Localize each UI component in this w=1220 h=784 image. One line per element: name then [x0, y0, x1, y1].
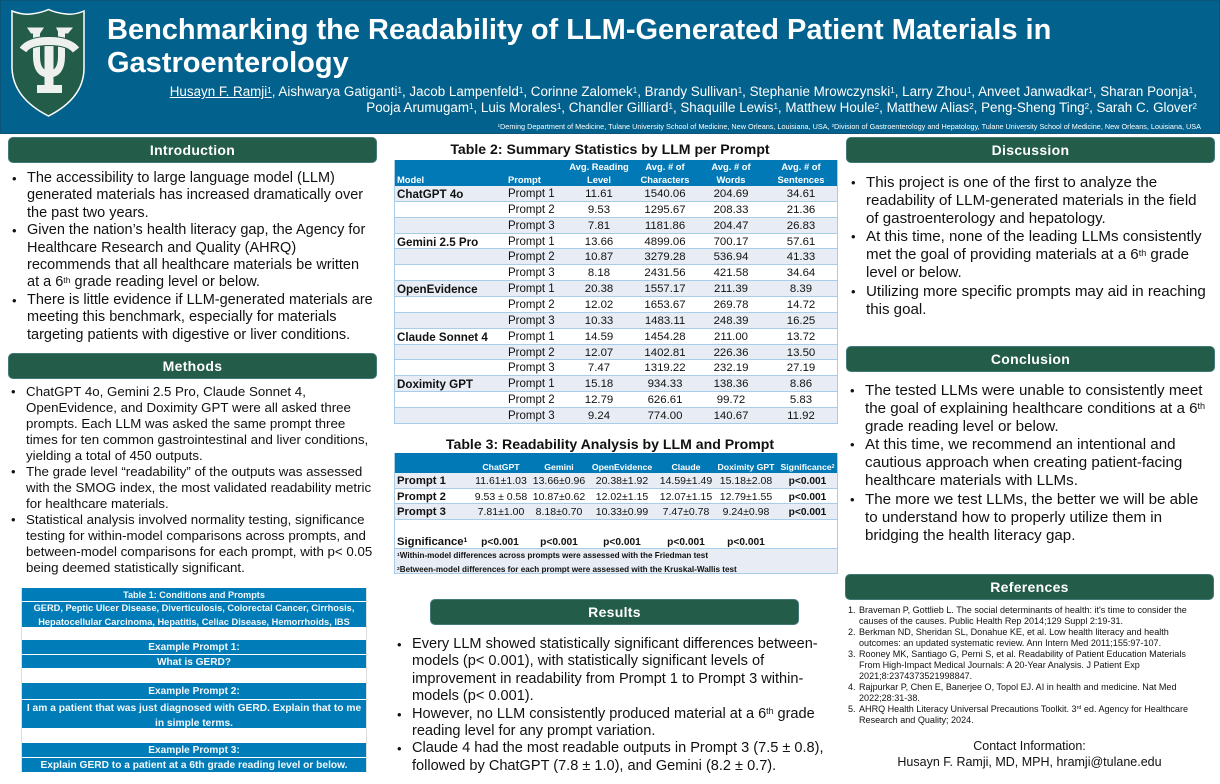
header banner: [0, 0, 1220, 134]
example prompt 3 label: [22, 743, 366, 757]
example prompt 1 text: [22, 655, 366, 668]
title: Gastroenterology: [107, 47, 349, 79]
text block: discussion bullets: [852, 174, 1206, 318]
text block: conclusion bullets: bridging the health literacy gap.: [865, 527, 1075, 544]
table 3: readability analysis: [395, 453, 837, 574]
table 2: summary statistics: Avg. # of: [781, 161, 821, 172]
table 2: summary statistics: [395, 160, 837, 424]
table 2: summary statistics: 626.61: [648, 394, 682, 406]
table 3: readability analysis: 7.81±1.00: [478, 506, 524, 518]
heading: Introduction: [8, 137, 377, 163]
significance row: p<0.001: [667, 537, 705, 548]
table 2: summary statistics: Prompt 1: [508, 331, 555, 343]
table 2: summary statistics: 204.69: [714, 188, 748, 200]
table 2: summary statistics: Prompt 1: [508, 236, 555, 248]
authors: Husayn F. Ramji1, Aishwarya Gatiganti1, Jacob Lampenfeld1, Corinne Zalomek1, Brandy Sullivan1, Stephanie Mrowczynski1, Larry Zhou1, Anveet Janwadkar1, Sharan Poonja1,: [170, 84, 1197, 99]
table 2: summary statistics: Prompt: [508, 174, 541, 185]
table 2: summary statistics: Claude Sonnet 4: [397, 331, 488, 344]
table 2: summary statistics: 34.61: [787, 188, 815, 200]
heading: References: References: [990, 579, 1069, 595]
text block: methods bullets: testing for within-model comparisons across prompts, and: [26, 528, 366, 543]
example prompt 2 label: Example Prompt 2:: [148, 686, 240, 697]
example prompt 3 label: Example Prompt 3:: [148, 745, 240, 756]
table 3: readability analysis: Gemini: [544, 462, 574, 472]
table 3: readability analysis: 9.24±0.98: [723, 506, 769, 518]
table 1: conditions and prompts: [22, 588, 366, 772]
heading: Methods: Methods: [163, 358, 222, 374]
table 2: summary statistics: 1557.17: [644, 283, 686, 295]
table 2: summary statistics: Avg. # of: [645, 161, 685, 172]
table 2: summary statistics: 57.61: [787, 236, 815, 248]
text block: introduction bullets: targeting patients with digestive or liver conditions.: [27, 327, 350, 343]
heading: table 2: Table 2: Summary Statistics by LLM per Prompt: [450, 141, 770, 157]
text: 1.: [848, 605, 856, 615]
table 3: readability analysis: Prompt 3: [397, 506, 446, 518]
table 2: summary statistics: 774.00: [648, 410, 682, 422]
table 2: summary statistics: 269.78: [714, 299, 748, 311]
table 3: readability analysis: 7.47±0.78: [663, 506, 709, 518]
text block: discussion bullets: level or below.: [866, 264, 962, 281]
text block: conclusion bullets: the goal of explaining healthcare conditions at a 6th: [865, 400, 1205, 417]
heading: Introduction: Introduction: [150, 142, 235, 158]
table 2: summary statistics: Prompt 3: [508, 410, 555, 422]
table 2: summary statistics: 12.02: [585, 299, 613, 311]
significance row: p<0.001: [603, 537, 641, 548]
table 2: summary statistics: 1319.22: [644, 362, 686, 374]
authors: [170, 84, 1197, 115]
table 2: summary statistics: 41.33: [787, 251, 815, 263]
text: 4.: [848, 682, 856, 692]
table 2: summary statistics: Characters: [640, 174, 690, 185]
table 3: readability analysis: 10.33±0.99: [596, 506, 648, 518]
table 2: summary statistics: 700.17: [714, 236, 748, 248]
table 2: summary statistics: 12.07: [585, 347, 613, 359]
text block: discussion bullets: of gastroenterology and hepatology.: [866, 210, 1106, 227]
table 3 footnotes: 1Within-model differences across prompts were assessed with the Friedman test: [397, 551, 708, 560]
table 2: summary statistics: 204.47: [714, 220, 748, 232]
text block: conclusion bullets: [850, 382, 1205, 544]
text block: discussion bullets: readability of LLM-generated materials in the field: [866, 192, 1197, 209]
text block: methods bullets: yielding a total of 450 outputs.: [26, 448, 203, 463]
table 2: summary statistics: Prompt 2: [508, 251, 555, 263]
text block: references list: Rooney MK, Santiago G, Perni S, et al. Readability of Patient Education Materials: [859, 649, 1186, 659]
text block: discussion bullets: this goal.: [866, 301, 926, 318]
table 2: summary statistics: 3279.28: [644, 251, 686, 263]
heading: Results: Results: [588, 604, 641, 620]
table 2: summary statistics: 14.59: [585, 331, 613, 343]
table 2: summary statistics: 8.86: [790, 378, 812, 390]
table 2: summary statistics: 13.66: [585, 236, 613, 248]
example prompt 2 text: I am a patient that was just diagnosed with GERD. Explain that to me: [27, 703, 361, 714]
text: 3.: [848, 649, 856, 659]
text block: references list: causes of the causes. Public Health Rep 2014;129 Suppl 2:19-31.: [859, 616, 1123, 626]
text block: introduction bullets: The accessibility to large language model (LLM): [27, 170, 335, 186]
text block: introduction bullets: [12, 170, 373, 343]
table 2: summary statistics: 7.47: [588, 362, 610, 374]
table 3: readability analysis: 15.18±2.08: [720, 475, 772, 487]
table 2: summary statistics: 1454.28: [644, 331, 686, 343]
table 2: summary statistics: 536.94: [714, 251, 748, 263]
text block: discussion bullets: This project is one of the first to analyze the: [866, 174, 1157, 191]
text block: references list: 2022;28:31-38.: [859, 693, 920, 703]
table 2: summary statistics: 1483.11: [645, 315, 685, 327]
table 2: summary statistics: 21.36: [787, 204, 815, 216]
table 3: readability analysis: 13.66±0.96: [533, 475, 585, 487]
table 2: summary statistics: 10.87: [585, 251, 613, 263]
significance row: p<0.001: [540, 537, 578, 548]
table 2: summary statistics: 14.72: [787, 299, 815, 311]
example prompt 3 text: Explain GERD to a patient at a 6th grade reading level or below.: [40, 760, 348, 771]
table 3: readability analysis: OpenEvidence: [592, 462, 652, 472]
contact information: [897, 739, 1162, 769]
table 2: summary statistics: Prompt 3: [508, 220, 555, 232]
title: Benchmarking the Readability of LLM-Generated Patient Materials in: [107, 14, 1051, 46]
table 3: readability analysis: 14.59±1.49: [660, 475, 712, 487]
contact information: Contact Information:: [973, 739, 1086, 753]
table 2: summary statistics: 7.81: [588, 220, 610, 232]
table 2: summary statistics: 2431.56: [644, 267, 686, 279]
table 2: summary statistics: Prompt 1: [508, 378, 555, 390]
text block: introduction bullets: meeting this benchmark, especially for materials: [27, 309, 336, 325]
text block: methods bullets: for healthcare materials.: [26, 496, 169, 511]
heading: Conclusion: [846, 346, 1215, 372]
table 2: summary statistics: Doximity GPT: [397, 378, 473, 391]
text block: introduction bullets: recommends that all healthcare materials be written: [27, 257, 359, 273]
text block: methods bullets: OpenEvidence, and Doximity GPT were all asked three: [26, 400, 351, 415]
table 2: summary statistics: Prompt 3: [508, 267, 555, 279]
example prompt 2 label: [22, 683, 366, 699]
text block: references list: Research and Quality; 2024.: [859, 715, 974, 725]
table 2: summary statistics: Level: [587, 174, 611, 185]
table 2: summary statistics: 9.53: [588, 204, 610, 216]
example prompt 1 label: [22, 640, 366, 654]
table 2: summary statistics: Sentences: [778, 174, 824, 185]
table 2: summary statistics: 10.33: [585, 315, 613, 327]
text block: results bullets: followed by ChatGPT (7.8 ± 1.0), and Gemini (8.2 ± 0.7).: [412, 758, 776, 774]
icon: Tulane shield logo: [11, 8, 85, 117]
significance row: p<0.001: [727, 537, 765, 548]
text block: introduction bullets: the past two years.: [27, 205, 149, 221]
text block: results bullets: improvement in readability from Prompt 1 to Prompt 3 within-: [412, 671, 803, 687]
table 1 conditions: GERD, Peptic Ulcer Disease, Diverticulosis, Colorectal Cancer, Cirrhosis,: [34, 603, 354, 613]
text: 5.: [848, 704, 856, 714]
table 3: readability analysis: Doximity GPT: [718, 462, 774, 472]
table 3: readability analysis: Claude: [672, 462, 700, 472]
table 2: summary statistics: 11.61: [585, 188, 613, 200]
text: 2.: [848, 627, 856, 637]
heading: Conclusion: Conclusion: [991, 351, 1070, 367]
heading: Results: [430, 599, 799, 625]
table 1 conditions: [22, 602, 366, 627]
table 2: summary statistics: 27.19: [787, 362, 815, 374]
table 1 title: [22, 588, 366, 601]
text block: conclusion bullets: to understand how to properly utilize them in: [865, 509, 1162, 526]
significance row: p<0.001: [481, 537, 519, 548]
table 3: readability analysis: 8.18±0.70: [536, 506, 582, 518]
table 2: summary statistics: 99.72: [717, 394, 745, 406]
table 3: readability analysis: p<0.001: [789, 476, 826, 487]
text block: conclusion bullets: grade reading level or below.: [865, 418, 1059, 435]
table 3: readability analysis: 12.79±1.55: [720, 491, 772, 503]
table 3: readability analysis: 20.38±1.92: [596, 475, 648, 487]
text block: methods bullets: Statistical analysis involved normality testing, significance: [26, 512, 364, 527]
table 2: summary statistics: Prompt 2: [508, 204, 555, 216]
heading: References: [845, 574, 1214, 600]
table 2: summary statistics: 34.64: [787, 267, 815, 279]
heading: table 3: Table 3: Readability Analysis by LLM and Prompt: [446, 436, 774, 452]
table 3: readability analysis: 11.61±1.03: [475, 475, 527, 487]
text block: conclusion bullets: healthcare materials with LLMs.: [865, 472, 1078, 489]
table 2: summary statistics: Prompt 2: [508, 299, 555, 311]
table 2: summary statistics: 8.18: [588, 267, 610, 279]
table 2: summary statistics: 12.79: [585, 394, 613, 406]
text block: methods bullets: prompts. Each LLM was asked the same prompt three: [26, 416, 345, 431]
table 1 conditions: Hepatocellular Carcinoma, Hepatitis, Celiac Disease, Hemorrhoids, IBS: [38, 616, 350, 626]
text block: references list: [848, 605, 1188, 725]
table 2: summary statistics: Prompt 1: [508, 188, 555, 200]
contact information: Husayn F. Ramji, MD, MPH, hramji@tulane.edu: [897, 755, 1162, 769]
table 2: summary statistics: 13.50: [787, 347, 815, 359]
table 3: readability analysis: 12.02±1.15: [596, 491, 648, 503]
table 3: readability analysis: Significance2: [780, 462, 835, 472]
example prompt 1 label: Example Prompt 1:: [148, 642, 240, 653]
table 2: summary statistics: ChatGPT 4o: [397, 188, 463, 201]
table 3: readability analysis: Prompt 2: [397, 491, 446, 503]
table 3: readability analysis: 12.07±1.15: [660, 491, 712, 503]
authors: Pooja Arumugam1, Luis Morales1, Chandler Gilliard1, Shaquille Lewis1, Matthew Houle2, Matthew Alias2, Peng-Sheng Ting2, Sarah C. Glover2: [366, 100, 1197, 115]
table 2: summary statistics: 4899.06: [644, 236, 686, 248]
text block: conclusion bullets: cautious approach when creating patient-facing: [865, 454, 1182, 471]
table 2: summary statistics: 5.83: [790, 394, 812, 406]
table 2: summary statistics: Avg. Reading: [569, 161, 629, 172]
text block: results bullets: Every LLM showed statistically significant differences between-: [412, 636, 818, 652]
text block: results bullets: models (p< 0.001), with statistically significant levels of: [412, 653, 764, 669]
table 2: summary statistics: 16.25: [787, 315, 815, 327]
table 2: summary statistics: 15.18: [585, 378, 613, 390]
table 2: summary statistics: Avg. # of: [711, 161, 751, 172]
text block: results bullets: models (p< 0.001).: [412, 688, 534, 704]
table 2: summary statistics: Prompt 2: [508, 347, 555, 359]
heading: Discussion: Discussion: [992, 142, 1069, 158]
table 2: summary statistics: Prompt 1: [508, 283, 555, 295]
table 2: summary statistics: 1540.06: [644, 188, 686, 200]
table 2: summary statistics: Prompt 3: [508, 362, 555, 374]
text block: methods bullets: [12, 384, 372, 575]
table 2: summary statistics: 232.19: [714, 362, 748, 374]
text block: references list: Berkman ND, Sheridan SL, Donahue KE, et al. Low health literacy and health: [859, 627, 1169, 637]
heading: Discussion: [846, 137, 1215, 163]
table 2: summary statistics: Prompt 2: [508, 394, 555, 406]
text block: introduction bullets: at a 6th grade reading level or below.: [27, 274, 260, 290]
table 2: summary statistics: 1402.81: [644, 347, 686, 359]
table 2: summary statistics: 1653.67: [644, 299, 686, 311]
text block: methods bullets: with the SMOG index, the most validated readability metric: [26, 480, 371, 495]
table 2: summary statistics: 13.72: [787, 331, 815, 343]
affiliations: 1Deming Department of Medicine, Tulane University School of Medicine, New Orleans, Louisiana, USA, 2Division of Gastroenterology and Hepatology, Tulane University School of Medicine, New Orleans, Louisiana, USA: [498, 122, 1201, 131]
text block: introduction bullets: There is little evidence if LLM-generated materials are: [27, 292, 373, 308]
text block: discussion bullets: Utilizing more specific prompts may aid in reaching: [866, 283, 1206, 300]
table 1 title: Table 1: Conditions and Prompts: [123, 590, 265, 600]
table 2: summary statistics: 934.33: [648, 378, 682, 390]
example prompt 2 text: [22, 700, 366, 728]
table 3: readability analysis: p<0.001: [789, 492, 826, 503]
table 3: readability analysis: 9.53 ± 0.58: [475, 491, 527, 503]
table 2: summary statistics: 138.36: [714, 378, 748, 390]
table 2: summary statistics: OpenEvidence: [397, 283, 478, 296]
heading: Methods: [8, 353, 377, 379]
text block: results bullets: However, no LLM consistently produced material at a 6th grade: [412, 706, 815, 722]
text block: conclusion bullets: The tested LLMs were unable to consistently meet: [865, 382, 1202, 399]
example prompt 2 text: in simple terms.: [155, 718, 233, 729]
text block: introduction bullets: Given the nation’s health literacy gap, the Agency for: [27, 222, 365, 238]
table 2: summary statistics: 9.24: [588, 410, 610, 422]
text block: references list: Braveman P, Gottlieb L. The social determinants of health: it's time to consider the: [859, 605, 1187, 615]
table 2: summary statistics: 140.67: [714, 410, 748, 422]
text block: references list: From High-Impact Medical Journals: A 20-Year Analysis. J Patient Exp: [859, 660, 1140, 670]
text block: references list: AHRQ Health Literacy Universal Precautions Toolkit. 3rd ed. Agency for Healthcare: [859, 704, 1188, 714]
text block: methods bullets: being deemed statistically significant.: [26, 560, 245, 575]
table 2: summary statistics: 211.39: [714, 283, 748, 295]
table 2: summary statistics: Gemini 2.5 Pro: [397, 236, 478, 249]
table 2: summary statistics: Model: [397, 174, 424, 185]
significance row: [395, 520, 837, 549]
text block: methods bullets: times for ten common gastrointestinal and liver conditions,: [26, 432, 368, 447]
text block: references list: Rajpurkar P, Chen E, Banerjee O, Topol EJ. AI in health and medicine. Nat Med: [859, 682, 1176, 692]
table 3: readability analysis: Prompt 1: [397, 475, 446, 487]
text block: references list: outcomes: an updated systematic review. Ann Intern Med 2011;155:97-107.: [859, 638, 1161, 648]
text block: results bullets: [398, 636, 824, 774]
text block: methods bullets: between-model comparisons for each prompt, with p< 0.05: [26, 544, 372, 559]
table 3 footnotes: [395, 549, 837, 573]
title: [107, 14, 1051, 79]
table 3: readability analysis: p<0.001: [789, 507, 826, 518]
text block: introduction bullets: Healthcare Research and Quality (AHRQ): [27, 240, 296, 256]
table 2: summary statistics: 1295.67: [644, 204, 686, 216]
table 2: summary statistics: 421.58: [714, 267, 748, 279]
text block: results bullets: Claude 4 had the most readable outputs in Prompt 3 (7.5 ± 0.8),: [412, 740, 824, 756]
table 2: summary statistics: 248.39: [714, 315, 748, 327]
table 2: summary statistics: 208.33: [714, 204, 748, 216]
table 3 footnotes: 2Between-model differences for each prompt were assessed with the Kruskal-Wallis test: [397, 565, 737, 574]
text block: methods bullets: The grade level “readability” of the outputs was assessed: [26, 464, 362, 479]
table 2: summary statistics: Words: [716, 174, 746, 185]
table 2: summary statistics: 11.92: [787, 410, 815, 422]
text block: conclusion bullets: The more we test LLMs, the better we will be able: [865, 491, 1198, 508]
text block: discussion bullets: met the goal of providing materials at a 6th grade: [866, 246, 1189, 263]
table 2: summary statistics: 8.39: [790, 283, 812, 295]
text block: references list: 2021;8:2374373521998847.: [859, 671, 972, 681]
example prompt 1 text: What is GERD?: [157, 657, 231, 668]
table 2: summary statistics: 211.00: [714, 331, 748, 343]
table 3: readability analysis: ChatGPT: [482, 462, 520, 472]
table 2: summary statistics: 20.38: [585, 283, 613, 295]
table 2: summary statistics: 1181.86: [645, 220, 685, 232]
table 3: readability analysis: 10.87±0.62: [533, 491, 585, 503]
text block: discussion bullets: At this time, none of the leading LLMs consistently: [866, 228, 1202, 245]
text block: conclusion bullets: At this time, we recommend an intentional and: [865, 436, 1176, 453]
text block: methods bullets: ChatGPT 4o, Gemini 2.5 Pro, Claude Sonnet 4,: [26, 384, 306, 399]
text block: introduction bullets: generated materials has increased dramatically over: [27, 187, 363, 203]
table 2: summary statistics: 26.83: [787, 220, 815, 232]
table 2: summary statistics: 226.36: [714, 347, 748, 359]
table 2: summary statistics: Prompt 3: [508, 315, 555, 327]
text block: results bullets: reading level for any prompt variation.: [412, 723, 655, 739]
significance row: Significance1: [397, 536, 467, 548]
